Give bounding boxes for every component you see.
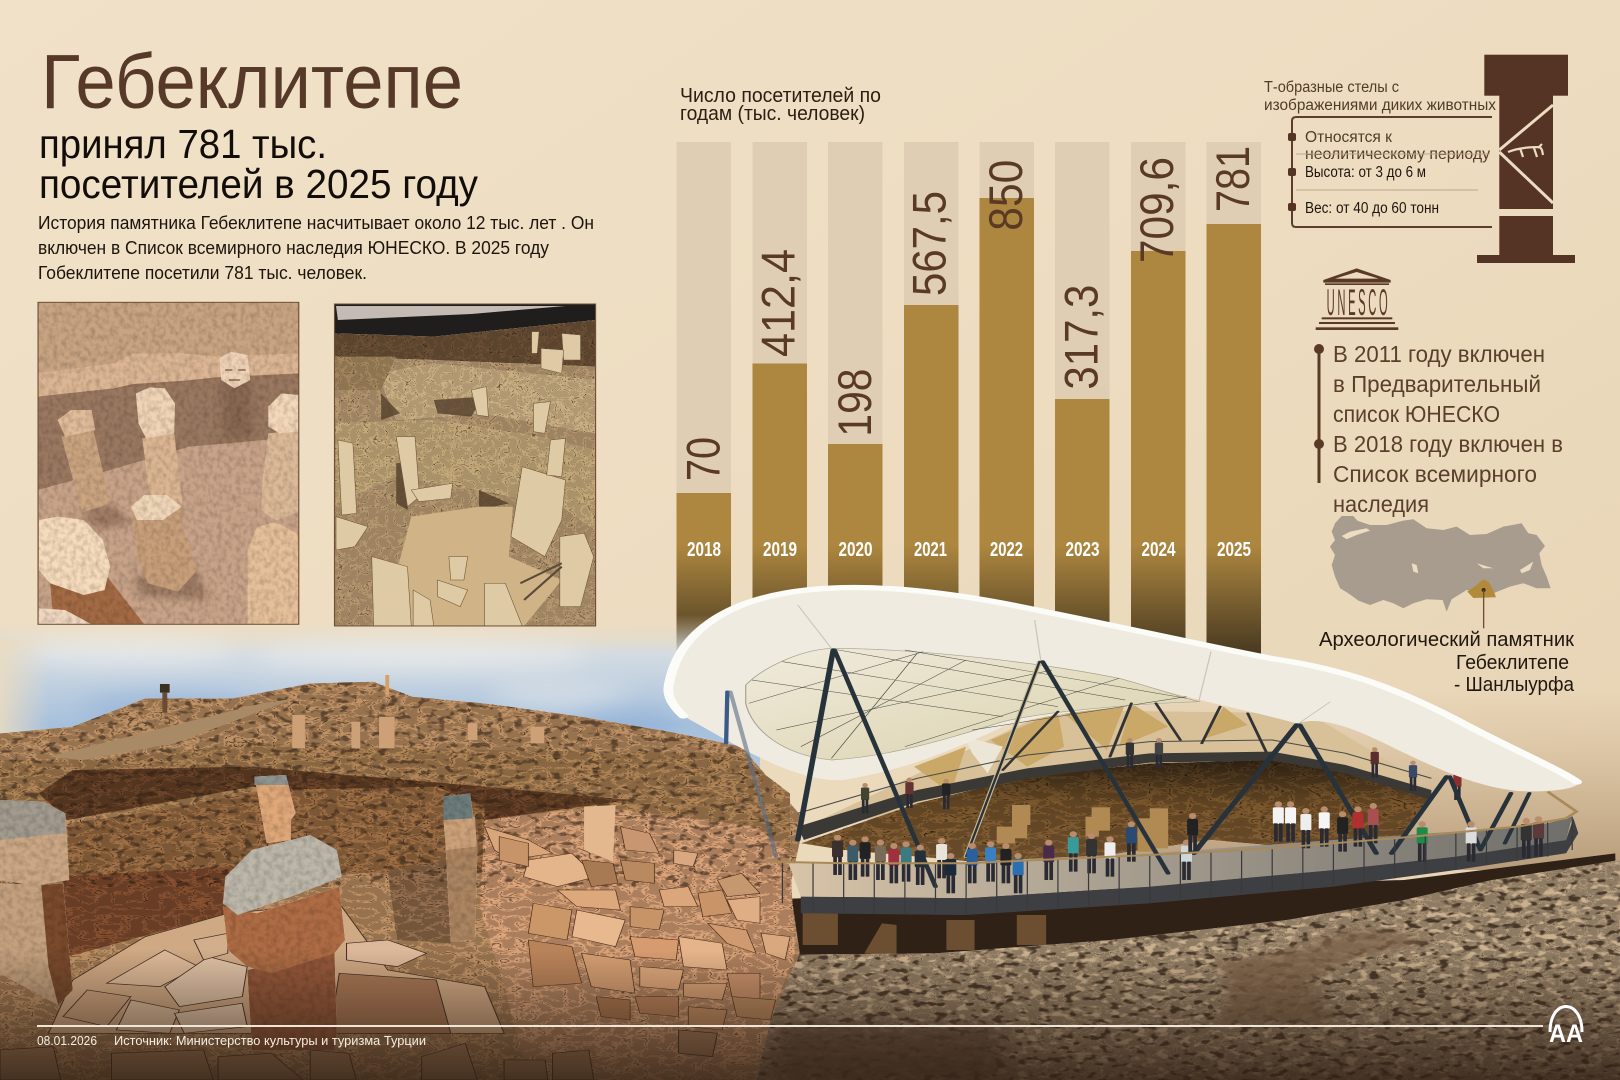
background stelae bbox=[292, 715, 544, 748]
icon: UNESCO temple bbox=[1316, 268, 1398, 330]
UNESCO block bbox=[1314, 268, 1563, 517]
intro paragraph: Гобеклитепе посетили 781 тыс. человек. bbox=[38, 262, 367, 283]
lower walkway deck bbox=[789, 817, 1572, 898]
UNESCO facts: в Предварительный bbox=[1333, 371, 1541, 397]
map caption bbox=[1319, 628, 1575, 696]
bracket bbox=[1292, 117, 1492, 227]
UNESCO facts: наследия bbox=[1333, 491, 1429, 517]
date: 08.01.2026 bbox=[37, 1033, 97, 1048]
stela: rear T pillar bbox=[254, 775, 296, 843]
stele facts: неолитическому периоду bbox=[1305, 146, 1490, 163]
paved floor bbox=[48, 903, 504, 1033]
stele heading: Т-образные стелы с bbox=[1264, 79, 1399, 96]
excavation pit bbox=[801, 760, 1431, 867]
pavilion photo bbox=[668, 588, 1578, 915]
right wall stones bbox=[485, 827, 790, 1030]
year labels: 2024 bbox=[1142, 539, 1176, 561]
stele heading bbox=[1264, 79, 1496, 114]
bar values: 781 bbox=[1206, 146, 1259, 212]
stele facts: Высота: от 3 до 6 м bbox=[1305, 164, 1426, 181]
source: Источник: Министерство культуры и туризма Турции bbox=[114, 1033, 426, 1048]
stela: small block bbox=[584, 805, 616, 862]
walkway side bbox=[801, 818, 1578, 915]
stele facts bbox=[1305, 129, 1490, 217]
footer bbox=[37, 1006, 1583, 1048]
foreground boulders bbox=[0, 1030, 717, 1080]
membrane grid bbox=[749, 649, 1186, 758]
stela: slim pillar bbox=[444, 793, 477, 942]
year labels: 2023 bbox=[1066, 539, 1100, 561]
intro paragraph: включен в Список всемирного наследия ЮНЕСКО. В 2025 году bbox=[38, 237, 550, 258]
timeline bbox=[1314, 344, 1324, 483]
hill and rubble bbox=[0, 682, 805, 1080]
intro paragraph bbox=[38, 212, 594, 283]
map caption: Археологический памятник bbox=[1319, 628, 1575, 651]
bar values: 317,3 bbox=[1055, 285, 1108, 390]
chart heading: Число посетителей по bbox=[680, 85, 881, 107]
stela: left T pillar bbox=[0, 800, 73, 1005]
year labels: 2020 bbox=[838, 539, 872, 561]
title: Гебеклитепе bbox=[41, 39, 463, 125]
white sail bbox=[964, 737, 1003, 773]
roof inner membrane bbox=[746, 648, 1199, 760]
year labels: 2022 bbox=[990, 539, 1023, 561]
stele facts: Относятся к bbox=[1305, 129, 1392, 146]
bar tracks bbox=[676, 142, 1261, 502]
column shadows bbox=[80, 373, 253, 600]
year labels: 2019 bbox=[763, 539, 797, 561]
map caption: Гебеклитепе bbox=[1456, 651, 1569, 674]
rubble shadows bbox=[0, 682, 790, 887]
map of Turkey bbox=[1330, 516, 1551, 628]
upper visitors bbox=[861, 738, 1462, 813]
roof panel seams bbox=[798, 605, 1330, 724]
bar values: 198 bbox=[828, 369, 881, 437]
year labels bbox=[687, 539, 1251, 561]
roof rim highlight bbox=[668, 588, 1577, 782]
map caption: - Шанлыурфа bbox=[1454, 673, 1575, 696]
sign bbox=[160, 675, 389, 713]
UNESCO facts: В 2011 году включен bbox=[1333, 341, 1545, 367]
AA logo: AA bbox=[1549, 1020, 1583, 1048]
T-stele info block bbox=[1264, 55, 1575, 263]
visitors on deck bbox=[832, 801, 1544, 893]
photo: right-hand rocky ground bbox=[747, 690, 1620, 1080]
intro paragraph: История памятника Гебеклитепе насчитывает около 12 тыс. лет . Он bbox=[38, 212, 594, 233]
AA logo bbox=[1549, 1006, 1583, 1048]
stele facts: Вес: от 40 до 60 тонн bbox=[1305, 200, 1439, 217]
bar values: 850 bbox=[979, 160, 1032, 231]
distant landscape through opening bbox=[813, 710, 1425, 823]
UNESCO facts: список ЮНЕСКО bbox=[1333, 401, 1500, 427]
photo: left excavated ruins bbox=[0, 675, 805, 1080]
bracket dots bbox=[1288, 133, 1296, 211]
icon: T-shaped stele bbox=[1477, 55, 1575, 263]
bar chart: visitors by year bbox=[676, 85, 1261, 660]
icon: UNESCO temple: UNESCO bbox=[1327, 281, 1388, 323]
dirt slope bbox=[48, 698, 296, 760]
bar values: 70 bbox=[676, 437, 729, 481]
chart heading bbox=[680, 85, 881, 125]
sky bbox=[0, 615, 760, 815]
subtitle: принял 781 тыс. bbox=[39, 121, 327, 167]
UNESCO facts: Список всемирного bbox=[1333, 461, 1537, 487]
bar fills bbox=[676, 198, 1261, 660]
bar values: 709,6 bbox=[1130, 157, 1183, 263]
bar values bbox=[676, 146, 1259, 481]
photo: excavated enclosure bbox=[335, 304, 596, 626]
shade sails bbox=[914, 703, 1248, 787]
excavation stones bbox=[997, 805, 1168, 852]
carved face bbox=[219, 352, 250, 388]
UNESCO facts: В 2018 году включен в bbox=[1333, 431, 1563, 457]
steel columns bbox=[726, 650, 1529, 887]
year labels: 2018 bbox=[687, 539, 721, 561]
stela: large front T pillar bbox=[223, 835, 345, 1050]
subtitle bbox=[39, 121, 478, 207]
chart heading: годам (тыс. человек) bbox=[680, 103, 865, 125]
upper walkway railing bbox=[798, 740, 1431, 813]
bottom shade bbox=[0, 950, 1620, 1080]
UNESCO facts bbox=[1333, 341, 1563, 517]
photo: carved columns bbox=[38, 302, 299, 624]
year labels: 2021 bbox=[914, 539, 947, 561]
bar values: 567,5 bbox=[902, 191, 956, 296]
walkway handrail bbox=[767, 792, 1576, 863]
subtitle: посетителей в 2025 году bbox=[39, 161, 478, 207]
stele heading: изображениями диких животных bbox=[1264, 97, 1496, 114]
year labels: 2025 bbox=[1217, 539, 1251, 561]
roof shell bbox=[669, 588, 1578, 791]
upper walkway bbox=[798, 752, 1431, 840]
walkway balusters bbox=[782, 817, 1572, 915]
bar values: 412,4 bbox=[751, 249, 804, 357]
